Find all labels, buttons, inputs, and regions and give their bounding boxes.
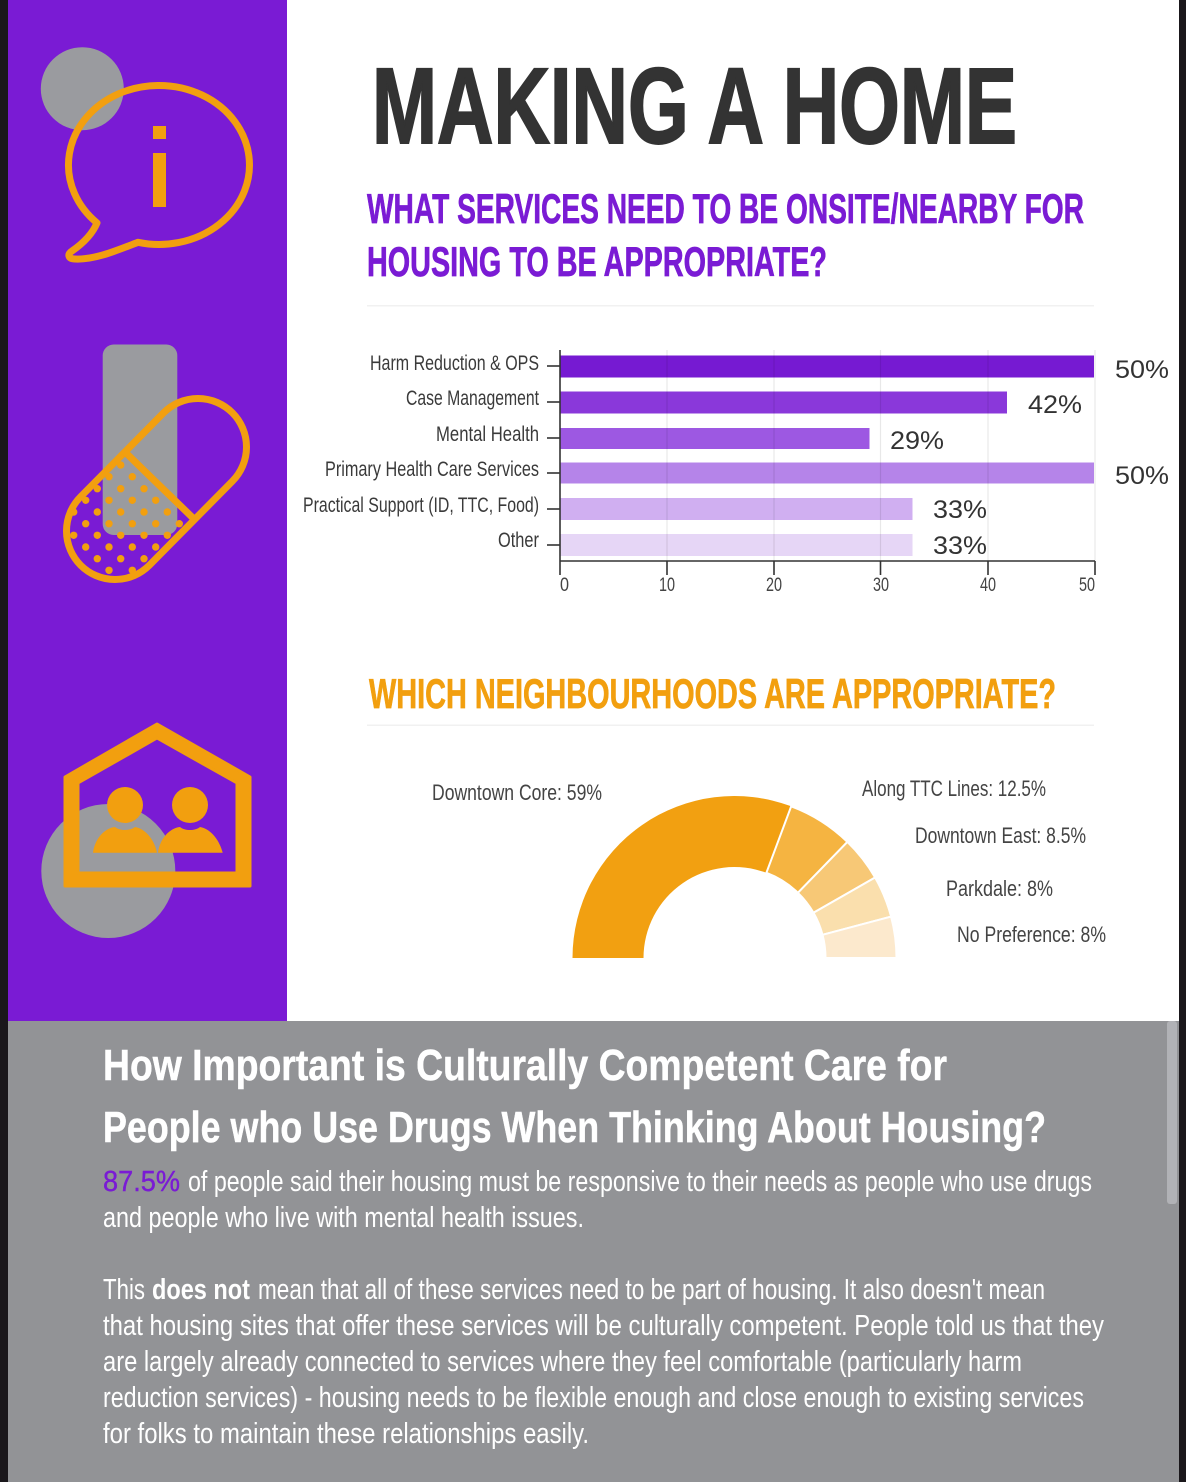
category labels: Case Management — [406, 387, 539, 410]
icon: info speech bubble — [41, 47, 249, 259]
axis numbers — [560, 575, 1095, 596]
value labels: 50% — [1115, 356, 1169, 384]
axis numbers: 10 — [659, 575, 675, 596]
bar chart: services — [303, 350, 1169, 596]
donut labels: No Preference: 8% — [957, 922, 1106, 947]
value labels — [890, 356, 1169, 560]
category labels: Other — [498, 529, 539, 552]
panel heading — [103, 1041, 1046, 1152]
donut labels: Parkdale: 8% — [946, 876, 1053, 901]
heading: services: HOUSING TO BE APPROPRIATE? — [367, 238, 827, 285]
donut labels — [432, 776, 1106, 947]
category labels: Practical Support (ID, TTC, Food) — [303, 494, 539, 517]
axis numbers: 50 — [1079, 575, 1095, 596]
axis numbers: 30 — [873, 575, 889, 596]
donut chart: neighbourhoods — [432, 776, 1106, 958]
body text: 87.5% — [103, 1166, 180, 1198]
axes and ticks — [547, 350, 1095, 575]
category labels: Mental Health — [436, 423, 539, 446]
body text: does not — [152, 1274, 250, 1306]
axis numbers: 20 — [766, 575, 782, 596]
icon: pill capsule — [66, 344, 247, 580]
category labels — [303, 352, 539, 552]
value labels: 29% — [890, 427, 944, 455]
icon: house with two people — [41, 724, 250, 938]
body text: and people who live with mental health issues. — [103, 1202, 584, 1234]
value labels: 33% — [933, 496, 987, 524]
axis numbers: 0 — [560, 575, 569, 596]
value labels: 42% — [1028, 391, 1082, 419]
category labels: Harm Reduction & OPS — [370, 352, 539, 375]
body text: for folks to maintain these relationships easily. — [103, 1418, 589, 1450]
value labels: 33% — [933, 532, 987, 560]
donut labels: Along TTC Lines: 12.5% — [862, 776, 1046, 801]
panel heading: How Important is Culturally Competent Care for — [103, 1041, 947, 1090]
body text — [103, 1166, 1104, 1450]
donut labels: Downtown East: 8.5% — [915, 823, 1086, 848]
body text: This — [103, 1274, 145, 1306]
bars — [560, 356, 1094, 556]
panel: cultural competence — [8, 1021, 1179, 1482]
axis numbers: 40 — [980, 575, 996, 596]
heading: services — [367, 185, 1084, 285]
main white panel — [287, 0, 1179, 1021]
value labels: 50% — [1115, 462, 1169, 490]
panel: purple icon sidebar — [8, 0, 287, 1021]
donut labels: Downtown Core: 59% — [432, 780, 602, 805]
category labels: Primary Health Care Services — [325, 458, 539, 481]
